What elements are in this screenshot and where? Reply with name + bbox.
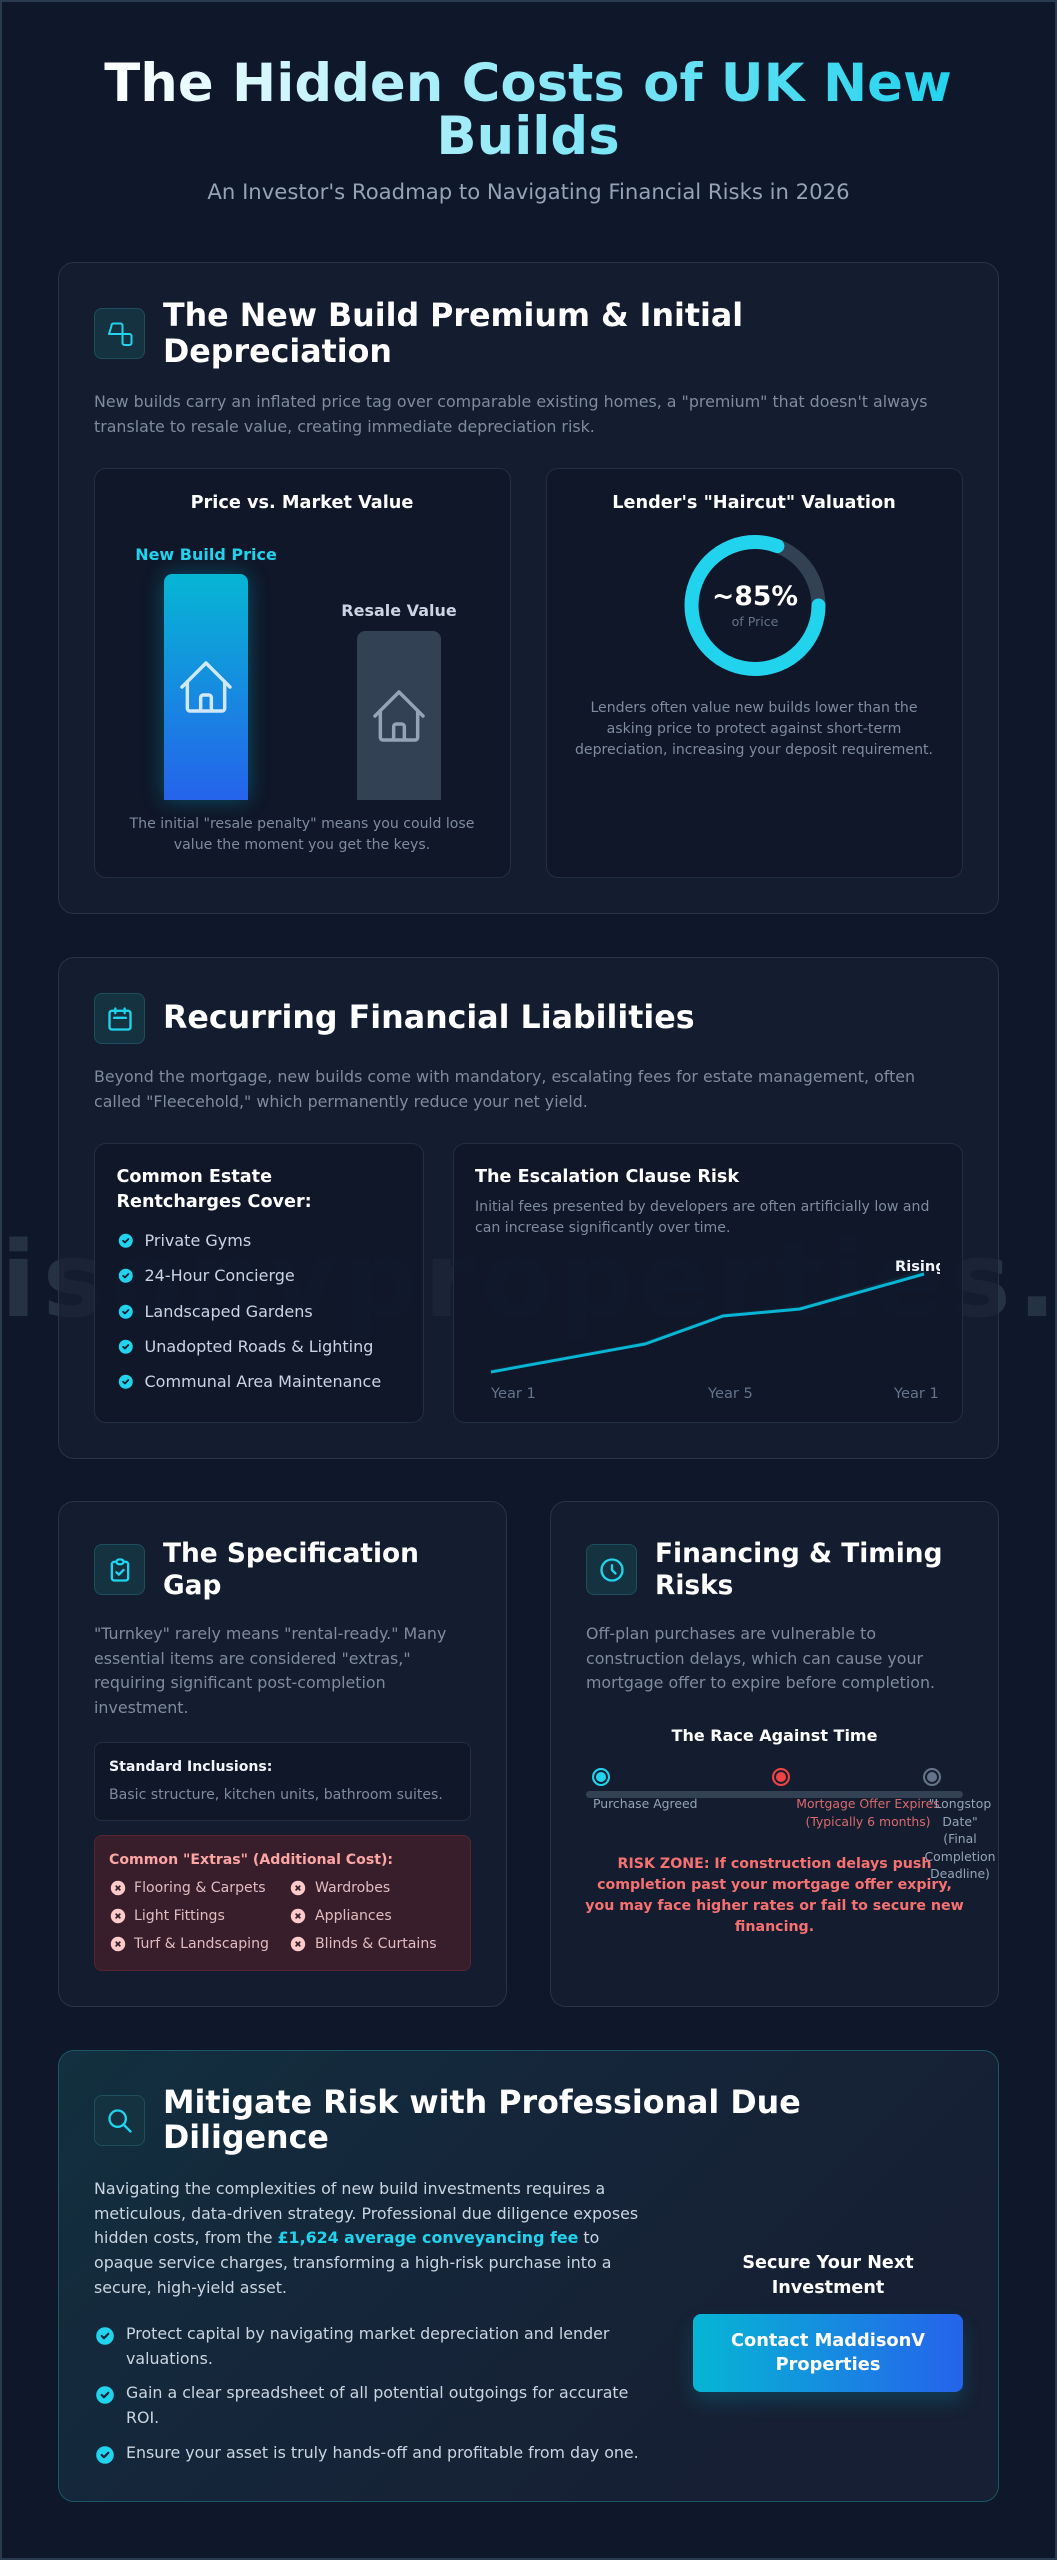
standard inclusions title: Standard Inclusions: <box>109 1759 272 1775</box>
intro text: New builds carry an inflated price tag over comparable existing homes, a "premium" that doesn't always <box>94 392 927 411</box>
panel: mitigate risk <box>58 2050 999 2502</box>
marker: mortgage offer expires <box>772 1768 790 1786</box>
donut value: ~85% <box>712 581 798 612</box>
label: longstop date: Completion <box>925 1848 995 1864</box>
bar: new build price <box>164 574 248 800</box>
intro text <box>94 1067 915 1111</box>
icon: calendar <box>94 993 145 1044</box>
risk zone warning: completion past your mortgage offer expiry, <box>597 1877 952 1893</box>
label: longstop date: (Final <box>943 1831 977 1846</box>
intro text: requiring significant post-completion <box>94 1673 386 1692</box>
intro text: "Turnkey" rarely means "rental-ready." Many <box>94 1624 446 1643</box>
intro text: called "Fleecehold," which permanently reduce your net yield. <box>94 1092 588 1111</box>
title: The Hidden Costs of UK New <box>104 53 952 114</box>
body text <box>94 2179 638 2297</box>
heading: Mitigate Risk with Professional Due <box>163 2085 801 2121</box>
heading <box>163 298 743 370</box>
label: mortgage offer expires <box>796 1796 940 1828</box>
intro text: essential items are considered "extras," <box>94 1649 411 1668</box>
label: longstop date: Deadline) <box>930 1866 990 1881</box>
caption <box>575 700 933 758</box>
label: longstop date <box>925 1796 995 1881</box>
button: contact <box>693 2314 963 2392</box>
button: contact: Contact MaddisonV <box>731 2330 925 2350</box>
body text: hidden costs, from the £1,624 average conveyancing fee to <box>94 2228 599 2247</box>
extra item: Blinds & Curtains <box>315 1936 437 1952</box>
intro text: Beyond the mortgage, new builds come with mandatory, escalating fees for estate management, often <box>94 1067 915 1086</box>
extra item: Light Fittings <box>134 1908 225 1924</box>
benefit item: valuations. <box>126 2349 213 2368</box>
panel: escalation clause risk <box>453 1143 963 1423</box>
list item: Communal Area Maintenance <box>144 1372 381 1390</box>
chart description: Initial fees presented by developers are often artificially low and <box>475 1199 929 1215</box>
body text: Navigating the complexities of new build investments requires a <box>94 2179 605 2198</box>
line chart: Year 1 <box>490 1385 536 1402</box>
standard inclusions text: Basic structure, kitchen units, bathroom suites. <box>109 1787 443 1803</box>
extra item: Wardrobes <box>315 1880 390 1896</box>
panel: new build premium <box>58 262 999 914</box>
panel: lender's haircut valuation <box>546 468 963 878</box>
title <box>104 57 952 163</box>
risk zone warning: financing. <box>735 1919 814 1935</box>
list item: Private Gyms <box>144 1231 251 1250</box>
caption: Lenders often value new builds lower than the <box>590 700 918 716</box>
chart description: can increase significantly over time. <box>475 1220 730 1236</box>
donut sublabel: of Price <box>732 614 778 629</box>
list heading: Rentcharges Cover: <box>116 1192 312 1212</box>
line chart <box>490 1258 940 1402</box>
heading <box>655 1538 942 1601</box>
risk zone warning: you may face higher rates or fail to secure new <box>585 1898 964 1914</box>
icon: search <box>94 2095 145 2146</box>
bar label: new build price: New Build Price <box>135 545 277 564</box>
chart heading: Lender's "Haircut" Valuation <box>612 493 896 513</box>
caption: The initial "resale penalty" means you could lose <box>130 816 474 832</box>
call to action heading: Investment <box>772 2278 884 2298</box>
intro text <box>586 1624 935 1692</box>
panel: specification gap <box>58 1501 507 2007</box>
intro text: Off-plan purchases are vulnerable to <box>586 1624 876 1643</box>
benefit item: Protect capital by navigating market depreciation and lender <box>126 2324 609 2343</box>
intro text <box>94 1624 446 1717</box>
extra item: Turf & Landscaping <box>134 1936 269 1952</box>
heading: The Specification <box>163 1538 419 1569</box>
list item: Landscaped Gardens <box>144 1302 313 1320</box>
icon: scale blocks <box>94 308 145 359</box>
caption: value the moment you get the keys. <box>174 837 430 853</box>
timeline heading: The Race Against Time <box>672 1726 877 1745</box>
title: Builds <box>436 106 620 167</box>
heading: Recurring Financial Liabilities <box>163 1000 695 1036</box>
heading: Diligence <box>163 2120 329 2156</box>
list heading <box>116 1167 312 1212</box>
heading: Depreciation <box>163 334 392 370</box>
chart description <box>475 1199 929 1236</box>
heading: Gap <box>163 1570 221 1601</box>
button: contact: Properties <box>776 2354 880 2375</box>
label: longstop date: "Longstop <box>929 1796 991 1811</box>
call to action heading <box>742 2253 914 2298</box>
panel: financing and timing risks <box>550 1501 999 2007</box>
line chart: Year 5 <box>707 1385 753 1402</box>
heading: The New Build Premium & Initial <box>163 298 743 334</box>
heading: Risks <box>655 1570 733 1601</box>
marker: longstop date <box>923 1768 941 1786</box>
bar: resale value <box>357 631 441 800</box>
body text: meticulous, data-driven strategy. Professional due diligence exposes <box>94 2204 638 2223</box>
call to action heading: Secure Your Next <box>742 2253 914 2273</box>
risk zone warning <box>585 1856 964 1935</box>
extra item: Appliances <box>315 1908 392 1924</box>
timeline track <box>586 1791 963 1798</box>
heading <box>163 2085 801 2156</box>
heading <box>163 1538 419 1601</box>
benefit item: Gain a clear spreadsheet of all potential outgoings for accurate <box>126 2383 628 2402</box>
label: longstop date: Date" <box>942 1814 978 1828</box>
benefit item <box>96 2324 610 2368</box>
panel: standard inclusions <box>94 1742 471 1821</box>
panel: common extras <box>94 1835 471 1971</box>
subtitle: An Investor's Roadmap to Navigating Financial Risks in 2026 <box>207 179 850 204</box>
benefit item: Ensure your asset is truly hands-off and profitable from day one. <box>126 2443 639 2462</box>
label: mortgage offer expires: (Typically 6 months) <box>806 1814 930 1828</box>
intro text: construction delays, which can cause your <box>586 1649 923 1668</box>
risk zone warning: RISK ZONE: If construction delays push <box>618 1856 931 1872</box>
marker: purchase agreed <box>592 1768 610 1786</box>
panel: recurring financial liabilities <box>58 957 999 1459</box>
extra item: Flooring & Carpets <box>134 1880 266 1896</box>
intro text: mortgage offer to expire before completion. <box>586 1673 935 1692</box>
panel: estate rentcharges <box>94 1143 424 1423</box>
list heading: Common Estate <box>116 1167 272 1187</box>
timeline <box>586 1768 995 1881</box>
heading: Financing & Timing <box>655 1538 942 1569</box>
extras title: Common "Extras" (Additional Cost): <box>109 1852 393 1868</box>
body text: secure, high-yield asset. <box>94 2278 287 2297</box>
chart heading: Price vs. Market Value <box>191 493 413 513</box>
intro text: investment. <box>94 1698 189 1717</box>
intro text: translate to resale value, creating immediate depreciation risk. <box>94 417 595 436</box>
benefit item <box>96 2383 628 2427</box>
list item: Unadopted Roads & Lighting <box>144 1336 373 1356</box>
icon: clock <box>586 1544 637 1595</box>
caption: depreciation, increasing your deposit requirement. <box>575 742 933 758</box>
label: purchase agreed: Purchase Agreed <box>593 1796 697 1811</box>
list item: 24-Hour Concierge <box>144 1266 295 1285</box>
icon: clipboard check <box>94 1544 145 1595</box>
intro text <box>94 392 927 436</box>
chart heading: The Escalation Clause Risk <box>475 1167 739 1187</box>
panel: price vs market value <box>94 468 511 878</box>
caption: asking price to protect against short-term <box>607 721 901 737</box>
label: mortgage offer expires: Mortgage Offer Expires <box>796 1796 940 1811</box>
body text: opaque service charges, transforming a high-risk purchase into a <box>94 2253 611 2272</box>
benefit item: ROI. <box>126 2408 159 2427</box>
caption <box>129 816 474 853</box>
bar label: resale value: Resale Value <box>341 601 457 620</box>
donut chart <box>684 535 826 676</box>
